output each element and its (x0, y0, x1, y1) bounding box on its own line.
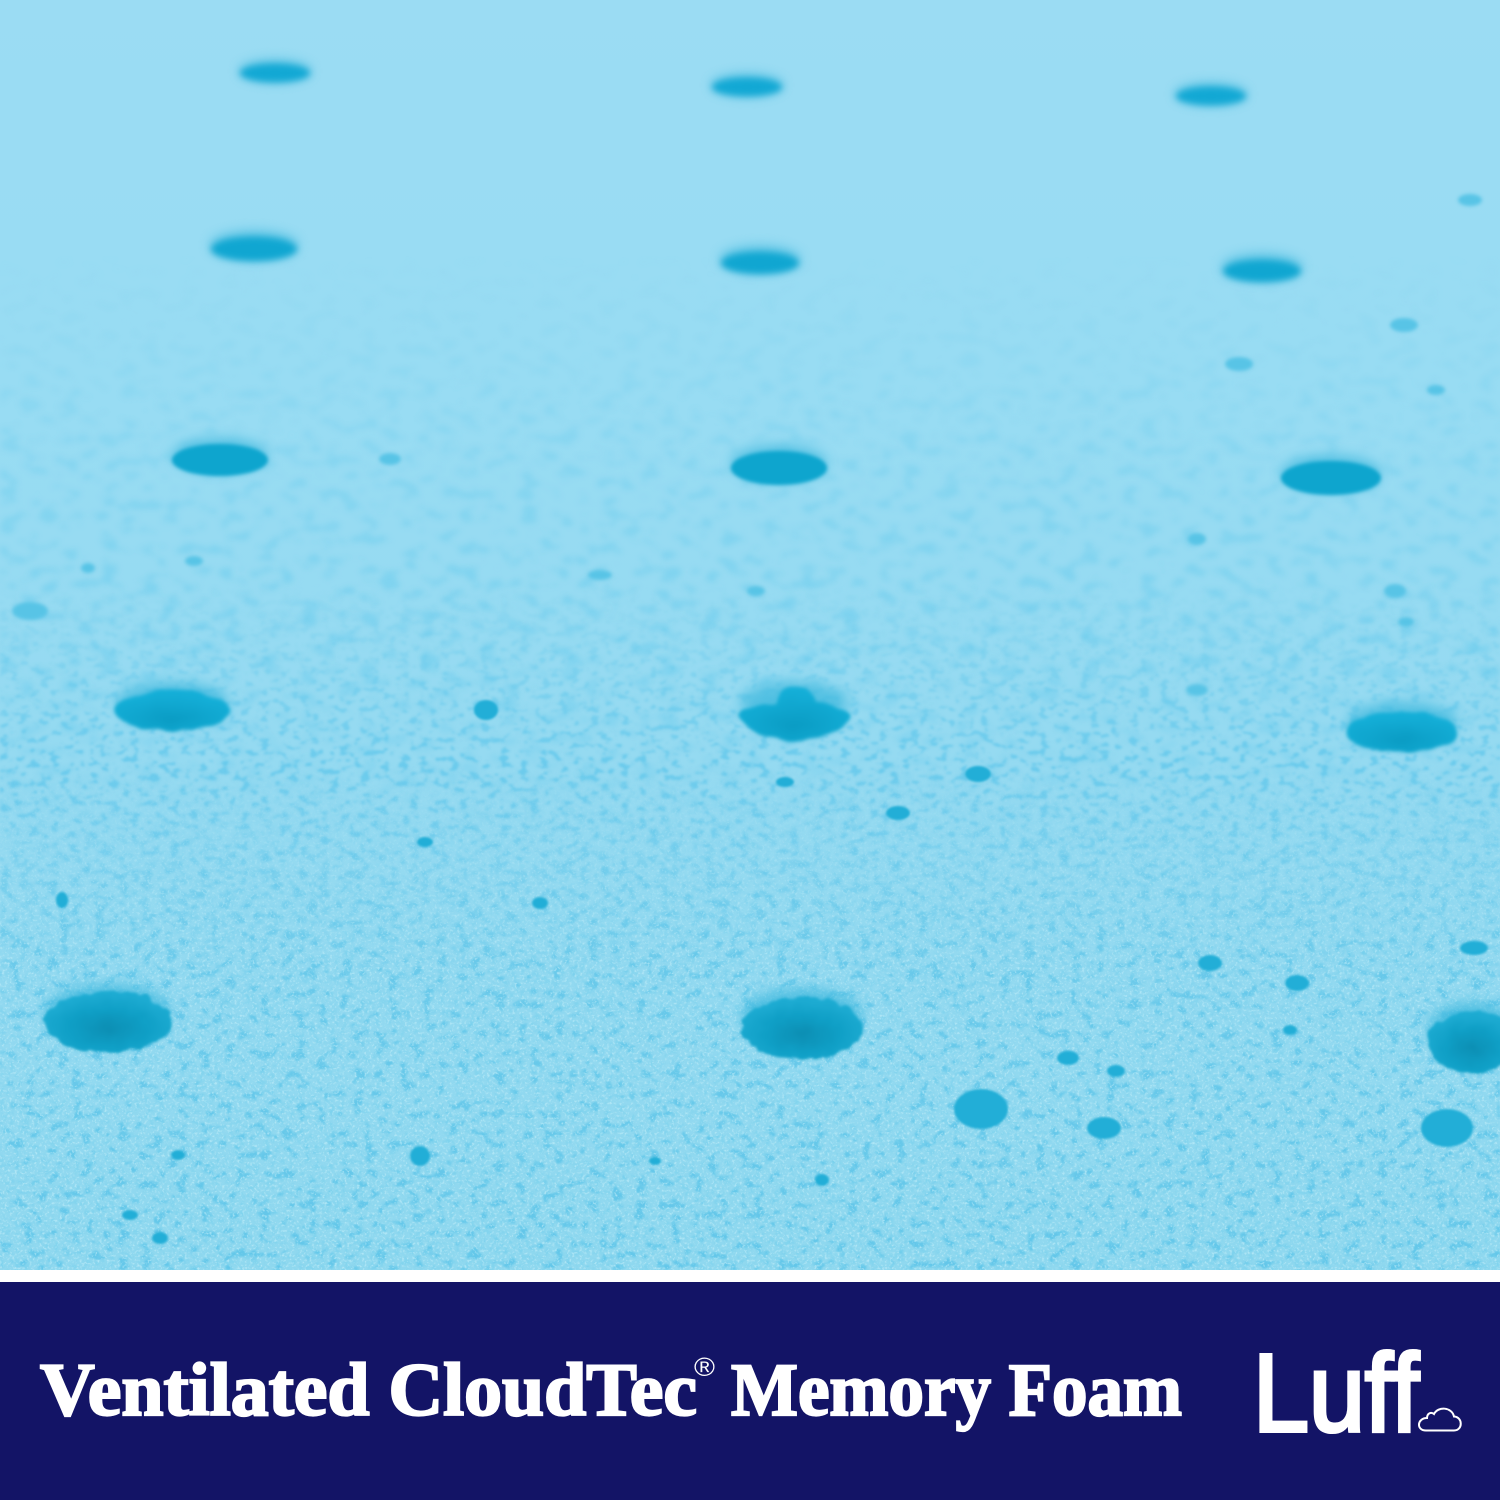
foam pore texture, foreground (0, 800, 1500, 1270)
logo: Luff with cloud (1253, 1332, 1461, 1455)
icon: cloud (1419, 1409, 1461, 1430)
title: ® (694, 1352, 715, 1382)
white divider (0, 1270, 1500, 1282)
row 2 ventilation holes (211, 237, 1301, 282)
small scattered pits (56, 700, 1488, 1244)
title: Memory Foam (731, 1349, 1182, 1432)
foam pore texture, mid distance (0, 615, 1500, 1014)
small soft far pits (12, 194, 1482, 696)
foam pore texture, blurred background (0, 356, 1500, 804)
logo wordmark: Luff (1253, 1332, 1419, 1455)
row 1 ventilation holes (240, 64, 1246, 105)
row 4 ventilation holes (115, 688, 1458, 752)
row 3 ventilation holes (172, 444, 1381, 495)
navy footer band (0, 1282, 1500, 1500)
row 5 ventilation holes (44, 991, 1500, 1073)
title: Ventilated CloudTec (40, 1349, 697, 1432)
title (40, 1349, 1182, 1432)
soft hole wall halos (46, 60, 1500, 1054)
